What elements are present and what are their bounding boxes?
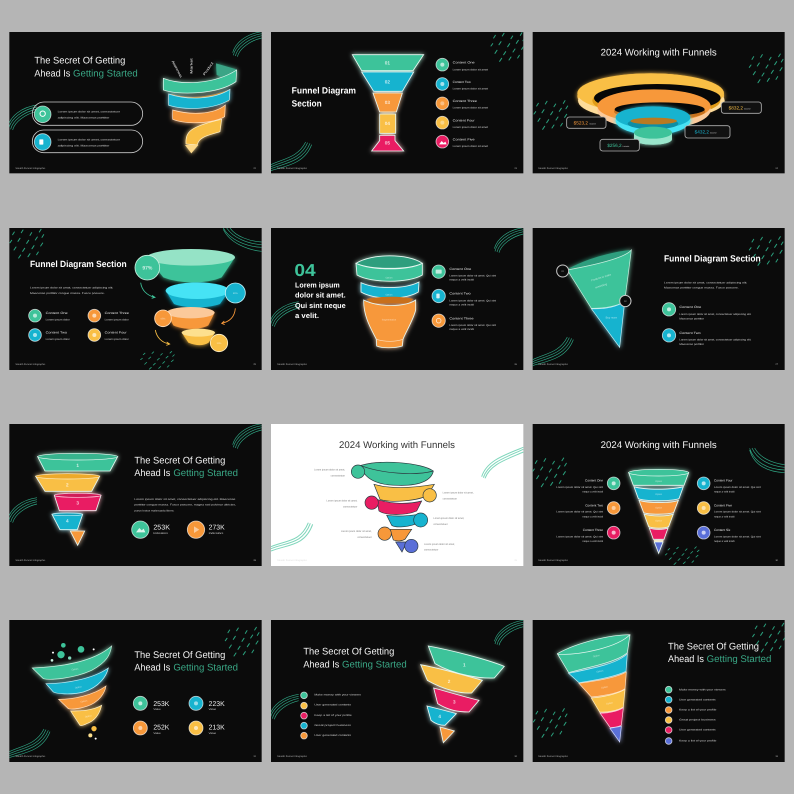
callout texts: Lorem ipsum dolor sit amet, xyxy=(314,468,345,471)
funnel diagram: Option xyxy=(85,714,92,718)
footer: Stealth Funnel Infographic xyxy=(538,755,568,758)
body text xyxy=(134,498,236,512)
heading: Ahead Is xyxy=(668,654,704,664)
body text: Lorem ipsum dolor sit amet, consectetuer adipiscing elit. xyxy=(664,281,747,284)
pill callout one xyxy=(32,102,143,125)
heading: Funnel Diagram Section xyxy=(664,253,761,263)
body text: Maecenas porttitor congue massa. Fusce posuere. xyxy=(664,286,739,289)
bullet list: Great project business xyxy=(314,724,351,727)
funnel diagram xyxy=(356,256,422,348)
footer: Stealth Funnel Infographic xyxy=(277,167,307,170)
panel: slide 5 section 04 funnel xyxy=(270,228,523,370)
particles xyxy=(51,643,97,740)
value label: Income xyxy=(623,145,629,148)
cone funnel: Option xyxy=(655,480,662,483)
statistic: 253K xyxy=(153,700,169,708)
funnel diagram: 4 xyxy=(438,714,441,719)
section statement: dolor sit amet. xyxy=(295,291,346,299)
content list: Lorem ipsum dolor sit amet xyxy=(453,145,488,148)
content list: Lorem ipsum dolor sit amet. Qui sint xyxy=(449,274,496,277)
funnel diagram: 2 xyxy=(66,482,69,487)
value label: Income xyxy=(744,108,751,110)
panel: slide 6 tilted cone xyxy=(533,228,785,370)
cone funnel: Option xyxy=(655,493,662,496)
content list: Content Three xyxy=(453,99,477,103)
content items: Lorem ipsum dolor xyxy=(105,318,129,321)
panel: slide 7 separated funnel xyxy=(8,424,262,566)
bullet list: Keep a list of your profile xyxy=(679,708,716,711)
footer: 33 xyxy=(775,755,778,758)
statistic: Value xyxy=(153,732,161,735)
value label: $832,2 xyxy=(729,105,743,110)
panel: slide 11 tilted separated funnel xyxy=(270,620,523,762)
footer: Stealth Funnel Infographic xyxy=(277,559,307,562)
statistic: Indicators xyxy=(209,532,223,535)
bullet list: Great project business xyxy=(679,718,716,721)
footer: 30 xyxy=(775,559,778,562)
panel: slide 9 six level cone xyxy=(533,424,785,566)
footer: Stealth Funnel Infographic xyxy=(277,755,307,758)
content items xyxy=(662,303,751,346)
body text: porttitor congue massa. Fusce posuere, magna sed pulvinar ultricies, xyxy=(134,503,236,506)
ring diagram xyxy=(577,73,725,145)
footer xyxy=(15,363,256,366)
content items: Content Three xyxy=(105,311,129,315)
value label xyxy=(567,117,606,128)
content items xyxy=(29,309,129,341)
callout texts: consectetuer xyxy=(331,474,345,477)
footer: 32 xyxy=(514,755,517,758)
funnel diagram xyxy=(36,453,118,545)
body text: purus lectus malesuada libero. xyxy=(134,509,174,512)
content items: Content Four xyxy=(105,331,127,334)
content list: Lorem ipsum dolor sit amet xyxy=(453,87,488,90)
heading xyxy=(292,86,356,108)
cone funnel: Option xyxy=(593,654,600,658)
footer: Stealth Funnel Infographic xyxy=(15,559,46,562)
footer xyxy=(538,363,778,366)
panel: slide 1 spiral funnel xyxy=(8,32,262,173)
callout texts: consectetuer xyxy=(424,548,438,551)
callout texts: consectetuer xyxy=(433,523,448,526)
cone funnel xyxy=(629,469,689,553)
bullet list: Keep a list of your profile xyxy=(314,714,352,717)
footer xyxy=(538,167,778,170)
statistic: Value xyxy=(209,708,216,711)
heading xyxy=(134,455,238,478)
content list: Lorem ipsum dolor sit amet xyxy=(453,106,488,109)
right content list: neque a velit incidi xyxy=(714,490,735,493)
value label: Income xyxy=(589,123,596,125)
footer: Stealth Funnel Infographic xyxy=(538,559,568,562)
right content list: Lorem ipsum dolor sit amet. Qui sint xyxy=(714,486,761,489)
body text xyxy=(664,281,747,289)
statistic xyxy=(132,521,170,538)
bullet list: User generated contents xyxy=(679,728,716,731)
value label: $256,2 xyxy=(607,143,622,148)
bullet list xyxy=(665,686,726,744)
pill callout one: Lorem ipsum dolor sit amet, consectetuer xyxy=(58,110,120,113)
content list: neque a velit incidi xyxy=(449,278,474,281)
footer: 27 xyxy=(775,363,778,366)
funnel diagram xyxy=(421,646,504,743)
footer: 31 xyxy=(253,755,256,758)
footer xyxy=(15,167,256,170)
cone funnel: Option xyxy=(655,506,662,509)
cone funnel: Option xyxy=(601,685,608,689)
content items: Lorem ipsum dolor xyxy=(105,338,129,341)
right content list: Content Four xyxy=(714,479,732,483)
panel: slide 4 bowls funnel xyxy=(9,228,262,370)
funnel diagram: 05 xyxy=(385,140,390,145)
bullet list: Make money with your viewers xyxy=(314,693,361,696)
footer: 29 xyxy=(514,559,517,562)
pill callout two: Lorem ipsum dolor sit amet, consectetuer xyxy=(58,138,120,141)
stage marker: 02 xyxy=(624,300,627,303)
content list: Lorem ipsum dolor sit amet. Qui sint xyxy=(449,324,496,327)
right content list: Content Six xyxy=(714,528,730,532)
cone funnel: Option xyxy=(655,520,662,522)
section statement: Lorem ipsum xyxy=(295,281,340,289)
funnel bowls: 65% xyxy=(161,318,165,320)
footer: Stealth Funnel Infographic xyxy=(538,363,568,366)
heading xyxy=(668,641,771,664)
callout texts: consectetuer xyxy=(443,497,457,500)
callout texts: Lorem ipsum dolor sit amet, xyxy=(326,499,357,502)
cone funnel: Products to make xyxy=(591,273,612,282)
right content list: neque a velit incidi xyxy=(714,540,735,543)
content list: Lorem ipsum dolor sit amet. Qui sint xyxy=(449,299,496,302)
heading: Getting Started xyxy=(173,662,238,673)
section statement: a velit. xyxy=(295,311,319,320)
funnel bowls xyxy=(135,249,245,352)
heading: 2024 Working with Funnels xyxy=(601,440,717,450)
callout texts: consectetuer xyxy=(343,505,357,508)
footer: 22 xyxy=(253,167,256,170)
bullet list: Keep a list of your profile xyxy=(679,739,716,742)
left content list: Content Two xyxy=(585,504,603,507)
heading: Getting Started xyxy=(707,654,771,664)
funnel diagram: Option xyxy=(386,277,392,279)
content list: Content Two xyxy=(449,292,471,296)
body text: Lorem ipsum dolor sit amet, consectetuer adipiscing elit. xyxy=(30,286,113,289)
content list: Lorem ipsum dolor sit amet xyxy=(453,126,488,129)
bullet list: User generated contents xyxy=(679,698,716,701)
heading: Funnel Diagram Section xyxy=(30,259,127,269)
callout texts: Lorem ipsum dolor sit amet, xyxy=(424,543,455,546)
heading: Ahead Is xyxy=(34,68,70,79)
content list: neque a velit incidi xyxy=(449,328,474,331)
statistic xyxy=(189,721,225,735)
funnel bowls: 30% xyxy=(217,342,221,345)
pill callout one: adipiscing elit. Maecenas porttitor xyxy=(58,116,110,119)
funnel diagram: Option xyxy=(386,294,392,296)
statistic: Value xyxy=(209,732,216,735)
funnel diagram: 03 xyxy=(385,100,390,105)
heading: Section xyxy=(292,98,322,108)
right content list: Lorem ipsum dolor sit amet. Qui sint xyxy=(714,510,761,513)
funnel diagram: Option xyxy=(75,685,82,689)
body text xyxy=(30,286,113,295)
funnel bowls: 97% xyxy=(142,265,152,271)
value label xyxy=(721,102,761,113)
right content list: neque a velit incidi xyxy=(714,515,735,518)
heading: Getting Started xyxy=(173,468,238,478)
content list: Content Three xyxy=(449,317,474,320)
stage marker xyxy=(620,295,631,307)
stage marker: 01 xyxy=(561,270,564,273)
funnel stage labels: Market xyxy=(190,58,194,74)
callout texts: Lorem ipsum dolor sit amet, xyxy=(341,530,372,533)
content list: Lorem ipsum dolor sit amet xyxy=(453,68,488,71)
footer: Stealth Funnel Infographic xyxy=(538,167,568,170)
right content list xyxy=(697,477,761,543)
heading: The Secret Of Getting xyxy=(34,55,125,66)
cone funnel xyxy=(557,635,630,742)
right content list: Content Five xyxy=(714,504,732,507)
bullet list: User generated contents xyxy=(314,703,351,706)
heading: 2024 Working with Funnels xyxy=(339,440,455,450)
statistic xyxy=(187,521,225,538)
footer: 24 xyxy=(775,167,778,170)
heading: The Secret Of Getting xyxy=(134,455,225,466)
content list xyxy=(432,265,496,331)
cone funnel: something xyxy=(595,283,607,289)
funnel diagram: Option xyxy=(71,668,79,671)
heading xyxy=(303,646,407,670)
heading: Ahead Is xyxy=(134,662,170,673)
heading: Funnel Diagram xyxy=(292,86,356,96)
heading: Ahead Is xyxy=(134,468,170,478)
section statement xyxy=(295,281,346,320)
body text: Lorem ipsum dolor sit amet, consectetuer adipiscing elit. Maecenas xyxy=(134,498,235,501)
left content list: neque a velit incidi xyxy=(582,515,603,518)
content list: Content Two xyxy=(453,80,471,84)
value label xyxy=(600,139,639,151)
footer xyxy=(15,755,256,758)
heading: Getting Started xyxy=(73,68,138,79)
content list: Content Five xyxy=(453,138,475,141)
statistic xyxy=(189,696,225,711)
section number: 04 xyxy=(294,261,316,280)
callout texts xyxy=(314,468,474,551)
panel: slide 2 stacked funnel xyxy=(271,32,525,173)
funnel bowls: 80% xyxy=(233,292,238,295)
cone funnel: Option xyxy=(596,669,604,673)
heading xyxy=(34,55,138,79)
bullet list xyxy=(301,692,361,739)
callout texts: Lorem ipsum dolor sit amet, xyxy=(443,491,474,494)
footer: 26 xyxy=(514,363,517,366)
content items: Content Two xyxy=(46,331,67,334)
statistic: 223K xyxy=(209,700,225,708)
heading: The Secret Of Getting xyxy=(303,646,394,657)
bullet list: Make money with your viewers xyxy=(679,688,726,691)
statistic: 273K xyxy=(209,523,225,531)
footer: Stealth Funnel Infographic xyxy=(15,755,46,758)
statistic xyxy=(133,696,169,711)
funnel diagram xyxy=(32,646,112,726)
statistic: Value xyxy=(153,708,161,711)
footer xyxy=(538,755,778,758)
heading: The Secret Of Getting xyxy=(134,650,225,660)
footer xyxy=(538,559,778,562)
value label: Income xyxy=(710,132,717,134)
footer: Stealth Funnel Infographic xyxy=(15,167,46,170)
callout texts: consectetuer xyxy=(357,536,372,539)
left content list xyxy=(556,477,620,543)
funnel diagram xyxy=(351,462,436,553)
funnel diagram xyxy=(352,55,424,151)
content items: Maecenas porttitor xyxy=(679,317,704,320)
value label: $523,2 xyxy=(574,120,588,125)
left content list: neque a velit incidi xyxy=(582,490,603,493)
funnel stage labels xyxy=(171,58,214,78)
content items: Lorem ipsum dolor xyxy=(46,338,70,341)
funnel diagram: 4 xyxy=(66,518,69,524)
footer xyxy=(277,167,517,170)
footer: 25 xyxy=(253,363,256,366)
funnel diagram: Option xyxy=(80,699,88,703)
funnel diagram: 01 xyxy=(385,60,390,65)
left content list: Lorem ipsum dolor sit amet. Qui sint xyxy=(556,535,603,538)
heading xyxy=(134,650,238,673)
statistic xyxy=(133,721,169,735)
content items: Content One xyxy=(679,305,701,309)
content items: Lorem ipsum dolor sit amet, consectetuer adipiscing elit. xyxy=(679,313,751,316)
funnel diagram: 04 xyxy=(385,121,390,126)
left content list: Lorem ipsum dolor sit amet. Qui sint xyxy=(556,486,603,489)
funnel stage labels: Product xyxy=(202,61,214,76)
value label: $432,2 xyxy=(695,129,709,135)
content items: Maecenas porttitor xyxy=(679,343,704,346)
content list: Content One xyxy=(453,61,475,65)
statistic: Indicators xyxy=(153,532,168,535)
statistic: 252K xyxy=(153,723,169,731)
cone funnel: Option xyxy=(606,701,613,705)
footer xyxy=(15,559,256,562)
value label xyxy=(685,126,730,138)
left content list: Content One xyxy=(585,479,603,483)
funnel diagram: 2 xyxy=(448,679,450,684)
content list: Content One xyxy=(449,267,471,271)
cone funnel xyxy=(567,250,631,347)
pill callout two xyxy=(32,130,143,153)
heading: Ahead Is xyxy=(303,659,339,670)
left content list: Content Three xyxy=(583,528,603,532)
panel: slide 12 tilted six level cone xyxy=(533,620,786,762)
footer xyxy=(277,755,517,758)
funnel stage labels: Awareness xyxy=(171,60,183,78)
funnel diagram: 3 xyxy=(76,500,79,506)
body text: Maecenas porttitor congue massa. Fusce posuere. xyxy=(30,292,105,295)
funnel diagram: 02 xyxy=(385,79,390,84)
panel: slide 3 funnel rings xyxy=(533,32,785,173)
arrows xyxy=(141,283,235,345)
footer: Stealth Funnel Infographic xyxy=(15,363,46,366)
left content list: neque a velit incidi xyxy=(582,540,603,543)
footer xyxy=(277,363,517,366)
stage marker xyxy=(557,265,569,277)
content list: Content Four xyxy=(453,119,475,122)
funnel diagram: 1 xyxy=(463,662,466,668)
right content list: Lorem ipsum dolor sit amet. Qui sint xyxy=(714,535,761,538)
heading: Getting Started xyxy=(342,659,407,670)
funnel diagram: Segmentation xyxy=(382,318,396,321)
content items: Lorem ipsum dolor sit amet, consectetuer adipiscing elit. xyxy=(679,338,751,341)
heading: 2024 Working with Funnels xyxy=(601,47,717,58)
footer: Stealth Funnel Infographic xyxy=(277,363,307,366)
cone funnel: Buy more xyxy=(606,316,617,319)
panel: slide 8 white funnel with bubbles xyxy=(271,424,523,566)
spiral funnel xyxy=(163,63,237,153)
callout texts: Lorem ipsum dolor sit amet, xyxy=(433,517,464,520)
bullet list: User generated contents xyxy=(314,734,351,737)
left content list: Lorem ipsum dolor sit amet. Qui sint xyxy=(556,510,603,513)
section statement: Qui sint neque xyxy=(295,301,346,310)
heading: The Secret Of Getting xyxy=(668,641,759,652)
funnel diagram: 3 xyxy=(453,699,456,704)
content list xyxy=(436,58,488,148)
panel: slide 10 tilted funnel with stats xyxy=(9,620,262,762)
footer xyxy=(277,559,517,562)
statistic: 213K xyxy=(209,723,225,731)
footer: 28 xyxy=(253,559,256,562)
statistic: 253K xyxy=(153,523,170,531)
funnel diagram: 1 xyxy=(76,463,79,468)
content items: Content One xyxy=(46,311,68,315)
footer: 23 xyxy=(514,167,517,170)
content items: Lorem ipsum dolor xyxy=(46,318,70,321)
content list: neque a velit incidi xyxy=(449,303,474,306)
pill callout two: adipiscing elit. Maecenas porttitor xyxy=(58,144,110,147)
content items: Content Two xyxy=(679,331,701,335)
